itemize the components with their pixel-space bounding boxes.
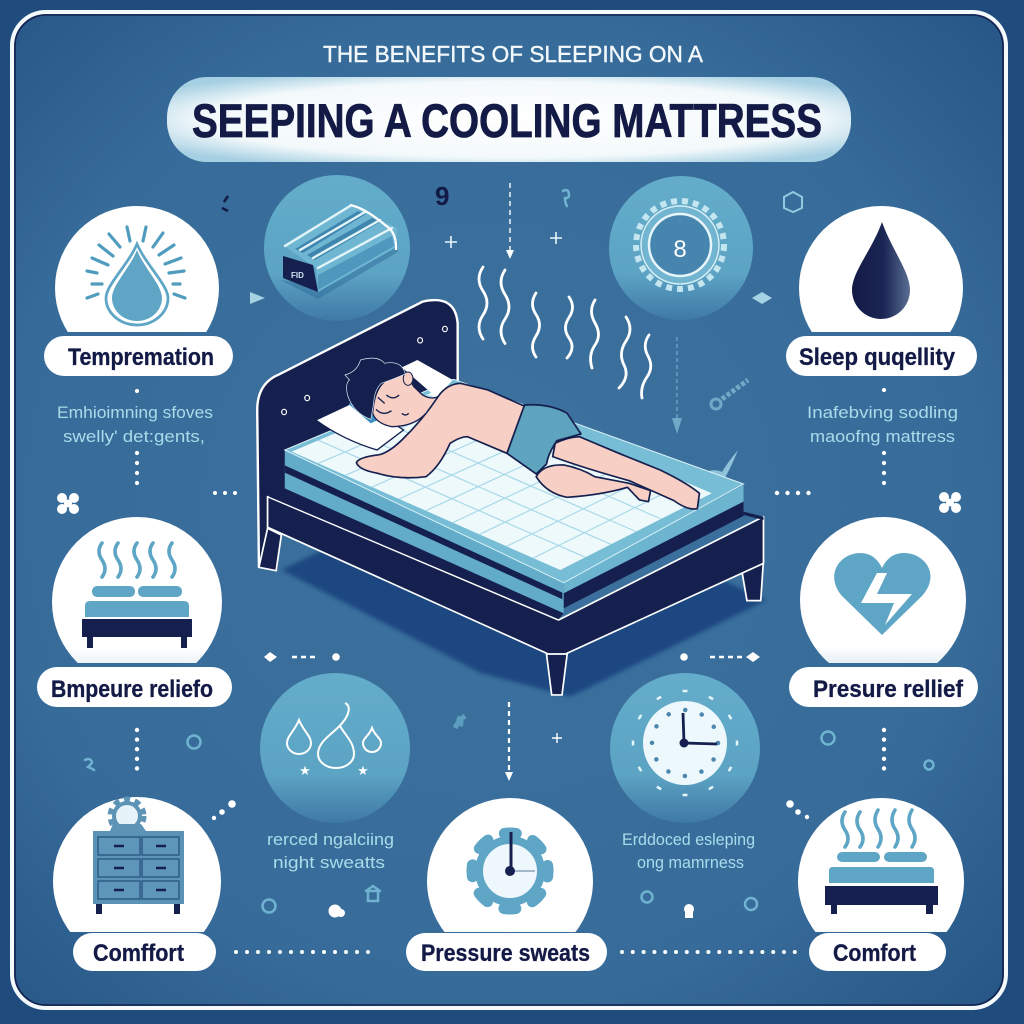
title pill: SEEPIING A COOLING MATTRESS xyxy=(192,94,822,147)
description: night sweats: night sweatts xyxy=(273,853,385,872)
panel: comfort bed xyxy=(798,798,964,971)
bed frame xyxy=(268,497,763,654)
circle: thermostat gear xyxy=(609,176,753,320)
label: Pressure sweats xyxy=(421,940,590,967)
icon: heart with bolt xyxy=(800,517,966,663)
dotted connector bottom right xyxy=(622,950,796,954)
circle: night sweats drops: ★ xyxy=(357,763,369,778)
headboard studs xyxy=(282,326,447,415)
circle: night sweats drops: ★ xyxy=(299,763,311,778)
icon: water drop with rays xyxy=(55,206,219,332)
diagonal dots xyxy=(212,800,809,820)
label: Comfort xyxy=(833,940,916,967)
dashed arrow top xyxy=(506,183,514,259)
person: shorts xyxy=(507,405,581,474)
quilted surface xyxy=(292,383,712,570)
small decorative icons top xyxy=(222,181,802,304)
circle: thermostat gear: 8 xyxy=(673,236,687,263)
vertical dots lower xyxy=(137,730,884,778)
description: night sweats: rerced ngalciing xyxy=(267,830,394,849)
title kicker: THE BENEFITS OF SLEEPING ON A xyxy=(323,41,704,67)
panel: sleep quality xyxy=(786,206,977,446)
description: Inafebving sodling xyxy=(807,403,958,422)
label: Bmpeure reliefo xyxy=(51,676,213,703)
icon: steaming bed xyxy=(798,798,964,932)
label xyxy=(44,336,233,376)
mattress top xyxy=(285,379,744,583)
connector dots right upper xyxy=(777,390,884,493)
left leg xyxy=(259,528,281,571)
icon: flower left xyxy=(57,493,79,514)
gap under mattress xyxy=(269,487,564,619)
title pill xyxy=(167,77,851,162)
panel: bed with steam xyxy=(37,517,232,707)
label xyxy=(37,667,232,707)
dashed arrow and decorations right of bed xyxy=(672,337,748,483)
description: Emhioimning sfoves xyxy=(57,403,213,422)
front leg xyxy=(547,654,567,695)
right leg xyxy=(741,560,763,601)
steam waves over bed xyxy=(479,267,651,398)
icon: gear clock xyxy=(427,798,593,932)
person: lower leg xyxy=(536,465,651,502)
label xyxy=(809,933,946,971)
connector right of bottom row xyxy=(680,652,760,662)
description xyxy=(807,403,958,446)
circle: clock xyxy=(610,673,760,823)
label: Tempremation xyxy=(68,344,214,371)
dashed arrow bottom xyxy=(505,702,513,781)
connector dots left upper xyxy=(137,391,237,493)
label: Comffort xyxy=(93,940,184,967)
dotted connector bottom left xyxy=(236,950,379,954)
panel: temperature xyxy=(44,206,233,446)
icon: steaming bed xyxy=(52,517,222,663)
description: swelly' det:gents, xyxy=(63,427,205,446)
mattress near side xyxy=(285,450,564,613)
person: head xyxy=(345,358,438,427)
label xyxy=(786,336,977,376)
description: night sweats xyxy=(267,830,394,872)
circle: night sweats drops xyxy=(260,673,410,823)
panel: comfort dresser xyxy=(53,797,221,971)
person: torso and arm xyxy=(356,383,524,478)
label xyxy=(406,933,607,971)
circle: mattress icon: FID xyxy=(291,271,304,280)
description xyxy=(57,403,213,446)
label: Sleep quqellity xyxy=(799,344,956,371)
main illustration: person sleeping on bed xyxy=(257,300,767,697)
dark stripe near xyxy=(285,465,562,599)
back pillow xyxy=(402,360,453,397)
label xyxy=(73,933,216,971)
connector left of bottom row xyxy=(264,652,340,662)
description: maoofng mattress xyxy=(810,427,955,446)
bed shadow xyxy=(281,547,767,697)
mattress foot side xyxy=(564,485,744,593)
circle: mattress icon xyxy=(264,175,410,321)
description: mattress: ong mamrness xyxy=(637,853,744,872)
label: Presure rellief xyxy=(813,676,964,703)
headboard xyxy=(257,300,458,567)
icon: dresser with clock xyxy=(53,796,221,932)
small decorative icons top: 9 xyxy=(435,181,449,211)
small decorative icons bottom xyxy=(85,716,934,918)
front pillow xyxy=(316,401,404,450)
label xyxy=(789,667,978,707)
person: upper leg xyxy=(553,437,699,509)
description: mattress: Erddoced esleping xyxy=(622,830,755,849)
icon: dark drop xyxy=(799,206,963,332)
panel: pressure relief xyxy=(789,517,978,707)
description: mattress xyxy=(622,830,755,872)
panel: pressure sweats xyxy=(406,798,607,971)
icon: flower right xyxy=(939,492,961,513)
